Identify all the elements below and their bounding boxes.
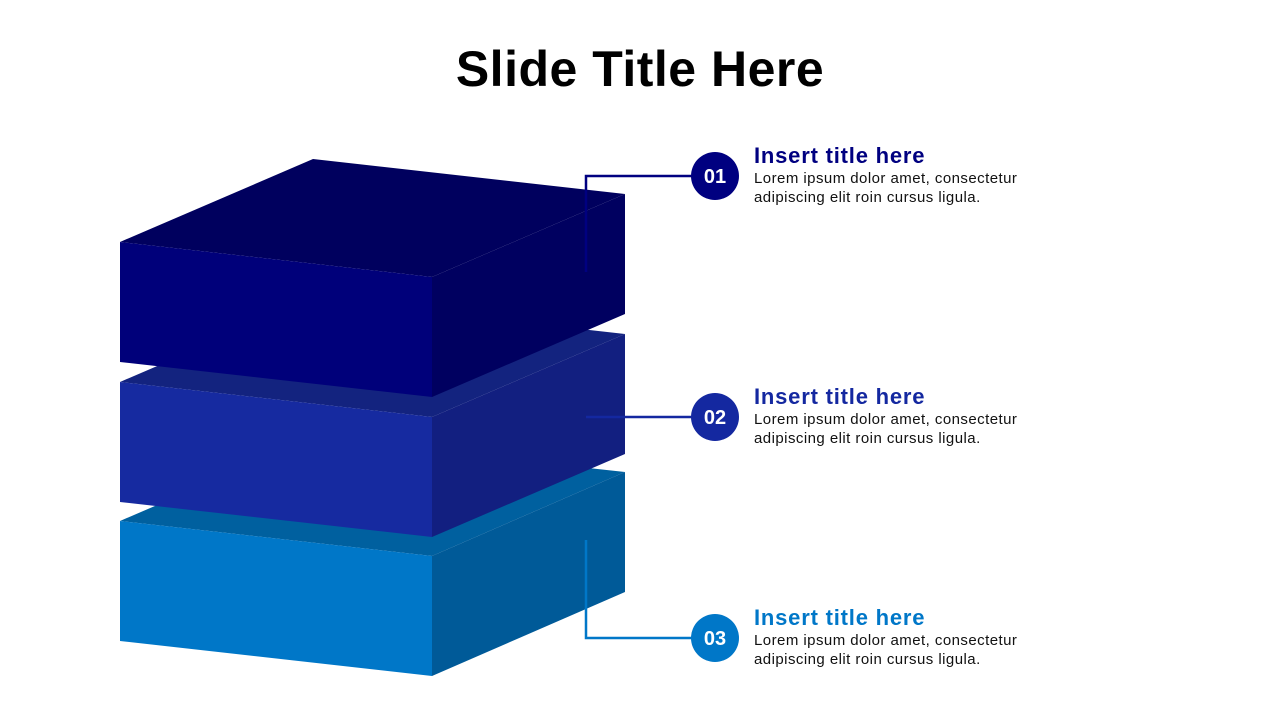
text block 1: Insert title here: [754, 143, 925, 168]
block 2: [120, 299, 625, 537]
badge 02: 02: [704, 407, 726, 429]
text block 1: Lorem ipsum dolor amet, consectetur: [754, 170, 1017, 187]
text block 1: adipiscing elit roin cursus ligula.: [754, 189, 981, 206]
text block 3: [754, 605, 1017, 668]
connector 1: [586, 176, 715, 272]
badge 01: 01: [704, 166, 726, 188]
badge 03: 03: [704, 628, 726, 650]
badge 02: [691, 393, 739, 441]
block 3: [120, 438, 625, 676]
badge 01: [691, 152, 739, 200]
text block 2: Lorem ipsum dolor amet, consectetur: [754, 411, 1017, 428]
text block 3: Lorem ipsum dolor amet, consectetur: [754, 632, 1017, 649]
text block 3: Insert title here: [754, 605, 925, 630]
connector 2: [586, 416, 715, 418]
text block 3: adipiscing elit roin cursus ligula.: [754, 651, 981, 668]
text block 2: Insert title here: [754, 384, 925, 409]
title: Slide Title Here: [456, 41, 824, 97]
text block 2: [754, 384, 1017, 447]
text block 1: [754, 143, 1017, 206]
connector 3: [586, 540, 715, 638]
block 1: [120, 159, 625, 397]
badge 03: [691, 614, 739, 662]
text block 2: adipiscing elit roin cursus ligula.: [754, 430, 981, 447]
